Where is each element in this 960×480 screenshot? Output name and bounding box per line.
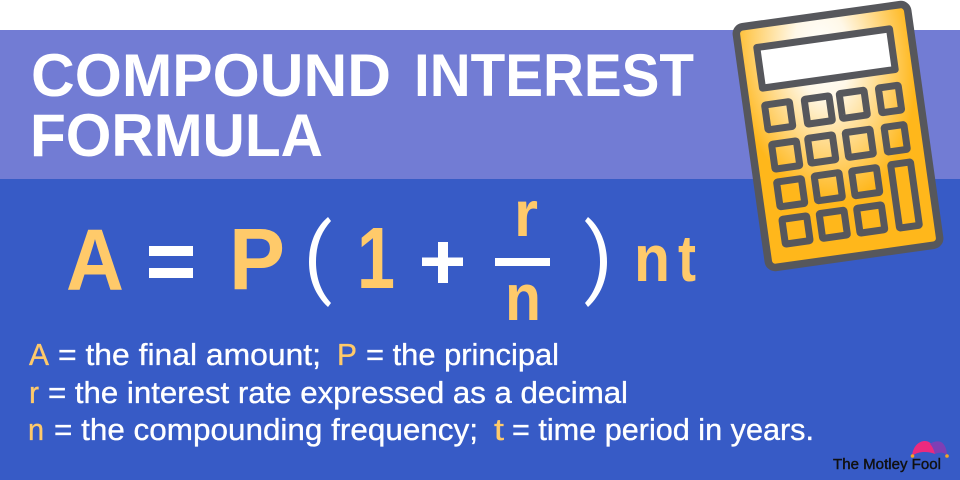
icon: calculator bbox=[735, 4, 941, 268]
fraction numerator r: r bbox=[514, 177, 538, 250]
equals sign bbox=[149, 246, 193, 278]
number one: 1 bbox=[357, 210, 395, 307]
logo: The Motley Fool bbox=[833, 441, 949, 473]
fraction denominator n: n bbox=[505, 260, 541, 334]
title bbox=[30, 42, 694, 169]
title: INTEREST bbox=[414, 42, 694, 109]
formula bbox=[66, 177, 696, 334]
legend text bbox=[28, 337, 814, 447]
title band bbox=[0, 30, 960, 179]
exponent nt: n bbox=[634, 221, 670, 295]
legend line 1: P bbox=[337, 337, 357, 372]
icon: jester hat bbox=[911, 441, 949, 458]
legend line 3: = time period in years. bbox=[512, 412, 814, 447]
legend line 2: r bbox=[29, 375, 39, 410]
logo wordmark: The Motley Fool bbox=[833, 457, 941, 473]
legend line 3: t bbox=[494, 412, 504, 447]
formula variable A: A bbox=[66, 212, 124, 309]
legend line 3: n bbox=[28, 412, 44, 447]
right parenthesis bbox=[585, 217, 607, 307]
exponent nt: t bbox=[678, 221, 696, 295]
fraction bar bbox=[495, 258, 550, 266]
title: COMPOUND bbox=[31, 42, 391, 109]
legend line 1: A bbox=[29, 337, 49, 372]
legend line 2: = the interest rate expressed as a decimal bbox=[48, 375, 628, 410]
legend line 1: = the final amount; bbox=[58, 337, 321, 372]
formula variable P: P bbox=[229, 211, 285, 308]
left parenthesis bbox=[309, 217, 331, 307]
legend line 1: = the principal bbox=[366, 337, 559, 372]
legend line 3: = the compounding frequency; bbox=[54, 412, 478, 447]
title: FORMULA bbox=[30, 102, 323, 169]
plus sign bbox=[422, 242, 463, 283]
